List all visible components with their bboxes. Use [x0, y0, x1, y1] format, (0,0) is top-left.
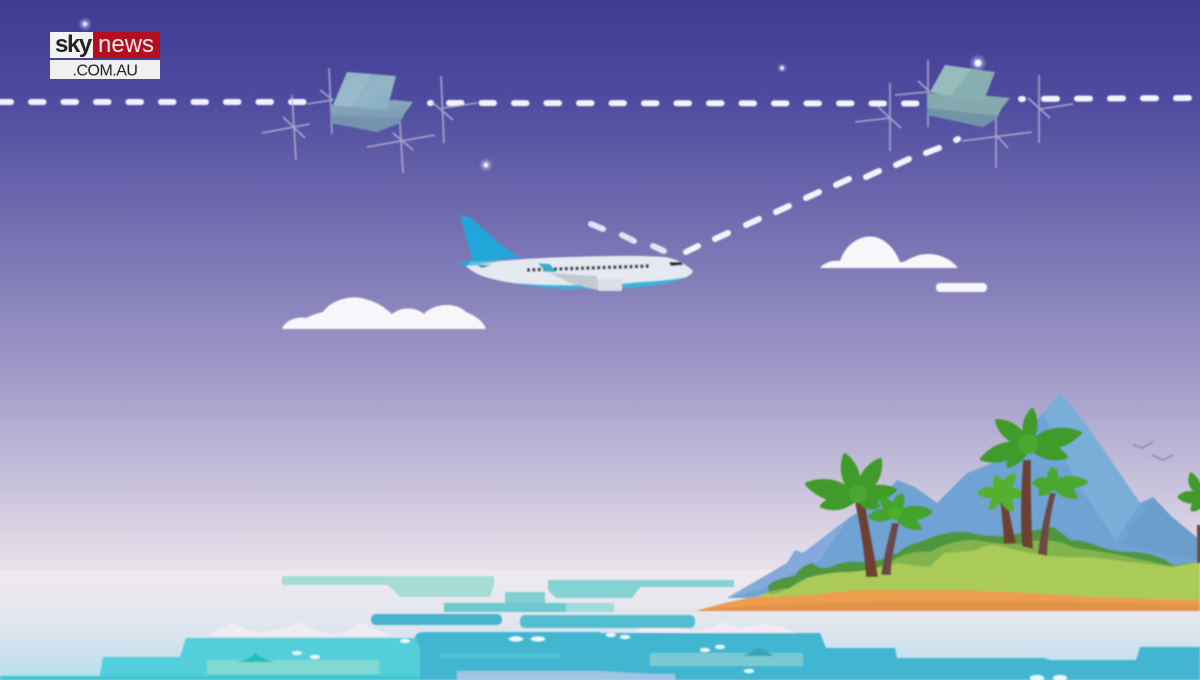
- logo news panel: [93, 32, 160, 58]
- pale teal rectangle left: [207, 660, 379, 674]
- pale water bands: [282, 576, 734, 612]
- plane cockpit: [669, 262, 683, 266]
- teal wave humps: [235, 653, 275, 662]
- satellite right body: [927, 93, 1010, 127]
- mid green hill band: [757, 540, 1200, 600]
- sea haze background: [0, 570, 1200, 680]
- plane: [457, 216, 693, 291]
- satellite left solar panel: [333, 72, 396, 110]
- plane winglet: [538, 263, 556, 272]
- pale teal rectangle right: [650, 653, 803, 666]
- palm tree 2: [870, 495, 931, 575]
- dashed signal from plane to satellite: [686, 139, 958, 252]
- logo sky text: sky: [55, 31, 93, 58]
- pale blue lower band: [457, 671, 675, 680]
- plane fuselage: [466, 256, 693, 287]
- small cloud bar: [936, 283, 987, 292]
- blue main water: [415, 632, 1200, 680]
- bright strip at foot: [0, 676, 420, 680]
- palm tree 5: [1034, 469, 1086, 556]
- palm tree 3: [982, 410, 1080, 549]
- palm tree 6 at right edge: [1179, 474, 1200, 563]
- island: [695, 392, 1200, 611]
- logo: sky news .com.au: [50, 31, 160, 80]
- white wave hills: [205, 620, 800, 636]
- cloud right: [820, 237, 958, 268]
- palm tree 4: [979, 475, 1022, 544]
- satellite left antennas: [262, 68, 477, 173]
- sea: [0, 576, 1200, 680]
- plane windows: [527, 266, 650, 270]
- sandy beach: [695, 590, 1200, 611]
- logo domain text: .COM.AU: [73, 62, 137, 80]
- logo news text: news: [98, 31, 154, 58]
- birds: [1133, 442, 1173, 460]
- satellite left body: [330, 100, 413, 132]
- dark water bar: [371, 614, 502, 625]
- plane wing: [550, 273, 622, 291]
- light turquoise main water: [99, 638, 440, 680]
- satellite right: [855, 60, 1073, 168]
- satellite right antennas: [855, 60, 1073, 168]
- logo sky panel: [50, 32, 93, 58]
- dashed orbit line: [0, 98, 1190, 104]
- stars: [78, 17, 987, 172]
- dashed signal reflected behind plane: [591, 224, 664, 251]
- plane belly stripe: [515, 277, 688, 289]
- cloud left: [282, 297, 486, 329]
- light green hill: [757, 545, 1200, 603]
- far mountains: [727, 392, 1200, 600]
- dark green hill band: [768, 527, 1200, 600]
- plane tail fin: [460, 216, 520, 261]
- logo domain panel: [50, 60, 160, 79]
- satellite left: [262, 68, 477, 173]
- white sparkles: [292, 633, 1067, 680]
- satellite right solar panel: [930, 65, 995, 103]
- palm tree 1: [807, 455, 895, 577]
